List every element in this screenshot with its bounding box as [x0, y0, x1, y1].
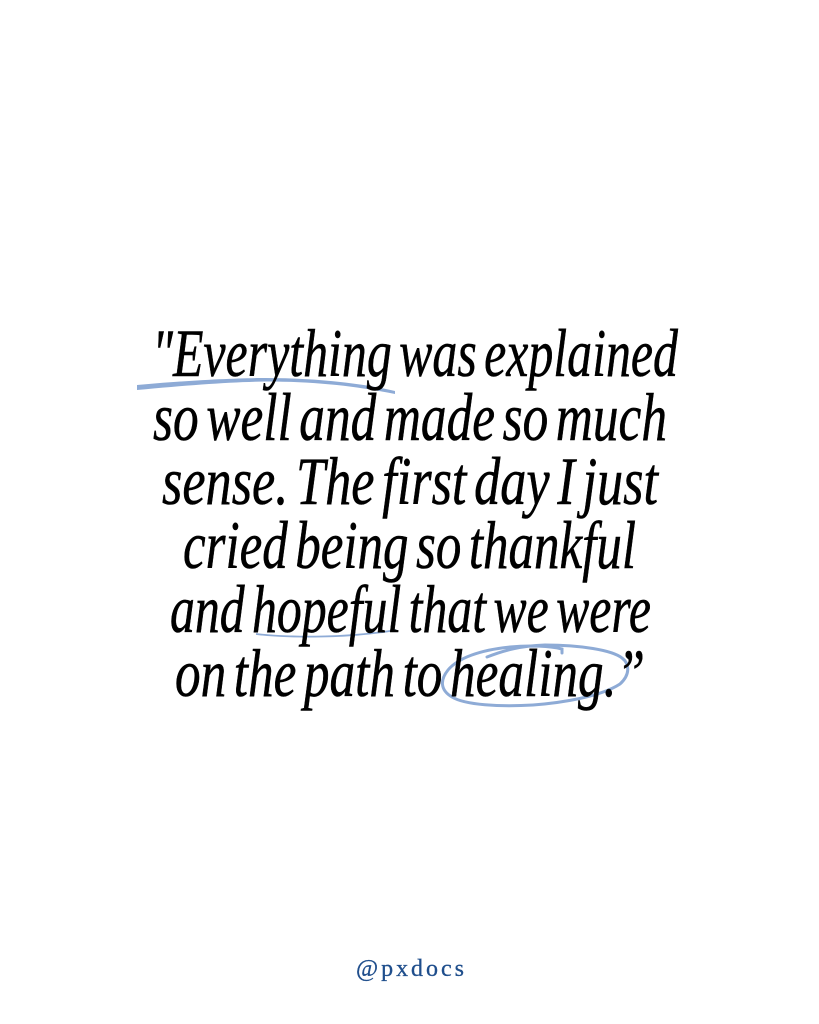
quote text [152, 315, 679, 711]
line 3: sense. The first day I just [162, 443, 660, 519]
line 2: so well and made so much [153, 379, 667, 455]
hand-drawn circle around healing [442, 645, 628, 706]
line 4: cried being so thankful [183, 507, 636, 583]
underline stroke: Everything [137, 378, 395, 394]
handle: @pxdocs [356, 956, 464, 982]
line 6: on the path to healing.” [175, 635, 645, 711]
underline stroke: hopeful [256, 630, 396, 637]
line 5: and hopeful that we were [170, 571, 651, 647]
